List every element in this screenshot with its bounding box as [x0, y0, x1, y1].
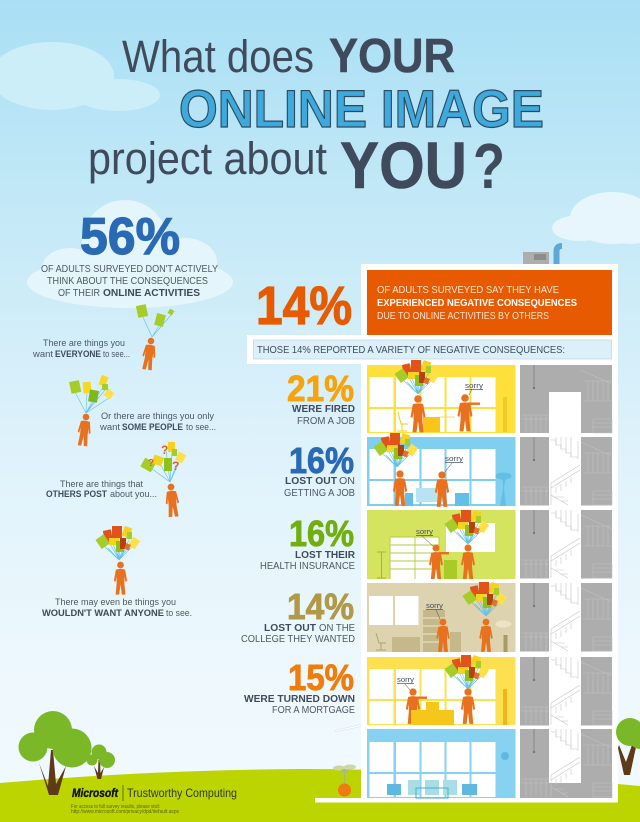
caption: others post: There are things that [60, 479, 143, 489]
logo: Microsoft Trustworthy Computing [72, 785, 237, 801]
floor 3: lost health insurance [367, 510, 516, 579]
title: YOU [340, 128, 467, 202]
stat: 15% mortgage: WERE TURNED DOWN [244, 694, 355, 705]
stairwell 6 [520, 729, 612, 798]
caption: some people [99, 411, 216, 432]
caption: others post: about you... [110, 489, 157, 499]
stat: 14% college [241, 586, 355, 645]
cloud caption [41, 264, 218, 299]
title: project about [88, 133, 327, 184]
floor 2: lost out on a job: sorry [445, 456, 464, 463]
tree: large left [18, 711, 92, 795]
title: What does [122, 31, 314, 82]
title: ONLINE IMAGE [179, 80, 544, 139]
caption: some people: Or there are things you only [101, 411, 215, 421]
stat: 21% fired: FROM A JOB [297, 416, 355, 427]
caption: nobody: WOULDN'T WANT ANYONE [42, 608, 164, 618]
stat: 16% job [284, 440, 355, 499]
floor 2: lost out on a job [367, 433, 516, 507]
tree: right edge [616, 718, 640, 775]
figure: balloons others post [140, 442, 186, 517]
callout box: 14 percent text: OF ADULTS SURVEYED SAY THEY HAVE [377, 285, 559, 296]
stat: 16% job: 16% [289, 440, 354, 481]
title [88, 30, 544, 202]
stat: 14% college: COLLEGE THEY WANTED [241, 634, 355, 645]
callout box: 14 percent text: EXPERIENCED NEGATIVE CONSEQUENCES [377, 298, 577, 309]
stairwell 2 [520, 437, 612, 506]
caption: some people: SOME PEOPLE [122, 422, 183, 432]
cloud shape [27, 200, 233, 308]
stat: 16% job: LOST OUT [285, 476, 337, 487]
stat: 21% fired [287, 368, 355, 427]
cloud caption: OF THEIR [58, 288, 100, 299]
stat: 14% college: ON THE [319, 623, 355, 634]
figure: balloons for everyone [136, 304, 174, 371]
logo: Microsoft Trustworthy Computing: Microsoft [72, 788, 119, 800]
stat: 16% insurance: HEALTH INSURANCE [260, 561, 355, 572]
title: YOUR [329, 30, 455, 83]
figure: balloons others post: ? [161, 443, 168, 457]
caption: others post: OTHERS POST [46, 489, 107, 499]
ground [0, 769, 640, 822]
floor 4: lost out on college: sorry [426, 603, 444, 610]
stat: 14% college: LOST OUT [264, 623, 316, 634]
figure: balloons nobody should see [95, 526, 140, 595]
floor 3: lost health insurance: sorry [416, 529, 434, 536]
cloud caption: THINK ABOUT THE CONSEQUENCES [47, 276, 208, 287]
stat: 16% insurance: LOST THEIR [295, 550, 356, 561]
stat: 16% insurance [260, 513, 356, 572]
callout box: 14 percent text: DUE TO ONLINE ACTIVITIES BY OTHERS [377, 311, 549, 322]
title: ? [473, 130, 505, 202]
stat: 21% fired: 21% [287, 368, 354, 409]
stat: 15% mortgage: FOR A MORTGAGE [272, 705, 355, 716]
caption: some people: want [99, 422, 121, 432]
stairwell 3 [520, 510, 612, 578]
floor 6: lobby [367, 729, 516, 798]
stairwell 5 [520, 657, 612, 726]
stat: 15% mortgage: 15% [288, 657, 354, 698]
footnote: survey link: For access to full survey results, please visit: [71, 804, 160, 810]
figure: balloons others post: ? [172, 459, 179, 473]
caption: everyone: to see... [103, 349, 130, 359]
footnote: survey link [71, 804, 179, 815]
logo: Microsoft Trustworthy Computing: Trustworthy Computing [127, 786, 237, 800]
footnote: survey link: http://www.microsoft.com/privacy/dpd/default.aspx [71, 809, 179, 815]
caption: nobody [42, 597, 192, 618]
stat: 14%: 14% [256, 276, 352, 336]
building [247, 264, 618, 802]
stat: 16% job: ON [339, 476, 355, 487]
icon: potted plant [333, 764, 356, 796]
tree: small left [86, 744, 115, 779]
stat: 16% job: GETTING A JOB [284, 488, 355, 499]
stat: 16% insurance: 16% [289, 513, 354, 554]
stairwell 4 [520, 583, 612, 652]
caption: everyone: There are things you [43, 338, 125, 348]
caption: everyone: want [32, 349, 54, 359]
caption: nobody: There may even be things you [55, 597, 176, 607]
stat: 15% mortgage [244, 657, 355, 716]
figure: balloons others post: ? [148, 458, 154, 469]
cloud caption: ONLINE ACTIVITIES [103, 288, 200, 299]
banner: variety of consequences [247, 335, 618, 364]
icon: roof air conditioner and pipe [523, 246, 562, 264]
caption: nobody: to see. [166, 608, 192, 618]
stairwell 1 [520, 365, 612, 433]
cloud panel: 56 percent [27, 200, 233, 308]
cloud: right [552, 192, 640, 244]
floor 4: lost out on college [367, 582, 516, 652]
stat: 56%: 56% [80, 208, 180, 266]
cloud: upper left [0, 42, 160, 111]
callout box: 14 percent text [367, 270, 612, 335]
floor 5: turned down for mortgage: sorry [397, 677, 415, 684]
caption: others post [46, 479, 157, 499]
caption: everyone: EVERYONE [55, 349, 101, 359]
floor 1: fired from a job [367, 360, 516, 433]
figure: balloons for some people [69, 375, 115, 447]
cloud caption: OF ADULTS SURVEYED DON'T ACTIVELY [41, 264, 218, 275]
building shell [315, 264, 618, 802]
caption: some people: to see... [186, 422, 216, 432]
stat: 14% college: 14% [287, 586, 354, 627]
caption: everyone [32, 338, 130, 359]
floor 1: fired from a job: sorry [465, 383, 484, 390]
floor 5: turned down for mortgage [367, 655, 516, 725]
banner: variety of consequences: THOSE 14% REPORTED A VARIETY OF NEGATIVE CONSEQUENCES: [257, 345, 565, 356]
stat: 21% fired: WERE FIRED [292, 404, 355, 415]
